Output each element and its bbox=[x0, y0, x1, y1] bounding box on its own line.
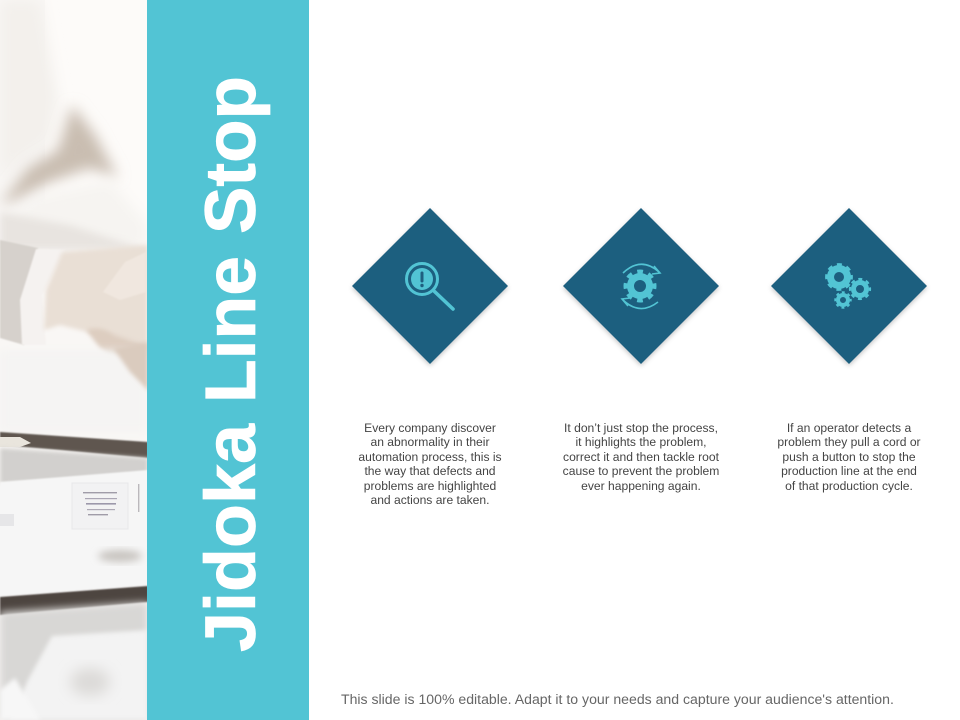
icon: three gears bbox=[826, 264, 870, 308]
footer note: This slide is 100% editable. Adapt it to your needs and capture your audience's attention. bbox=[341, 691, 894, 707]
text block: column 3 bbox=[777, 421, 921, 493]
text block: column 1 bbox=[358, 421, 502, 507]
photo: handshake over business documents bbox=[0, 0, 147, 720]
text block: column 2 bbox=[563, 421, 719, 493]
mini chart in document bbox=[0, 484, 139, 526]
diamond 3 with three gears icon bbox=[771, 208, 927, 364]
text block: column 2: ever happening again. bbox=[581, 479, 701, 493]
text block: column 1: and actions are taken. bbox=[370, 493, 490, 507]
title: Jidoka bbox=[192, 423, 271, 652]
text block: column 3: problem they pull a cord or bbox=[777, 435, 921, 449]
text block: column 1: Every company discover bbox=[364, 421, 496, 435]
panel: diamond icons bbox=[351, 208, 928, 367]
title: Line bbox=[192, 256, 271, 403]
diamond 2 with cycle gear icon bbox=[563, 208, 719, 364]
text block: column 2: it highlights the problem, bbox=[575, 435, 707, 449]
icon: gear with cycle arrows bbox=[622, 264, 660, 309]
text block: column 1: an abnormality in their bbox=[370, 435, 489, 449]
title bbox=[192, 76, 271, 652]
text block: column 2: It don’t just stop the process, bbox=[564, 421, 718, 435]
text block: column 2: correct it and then tackle root bbox=[563, 450, 719, 464]
diamond 1 with magnifier alert icon bbox=[352, 208, 508, 364]
title band bbox=[147, 0, 309, 720]
text block: column 1: the way that defects and bbox=[364, 464, 496, 478]
text block: column 3: of that production cycle. bbox=[785, 479, 913, 493]
text block: column 1: problems are highlighted bbox=[364, 479, 496, 493]
text block: column 3: If an operator detects a bbox=[787, 421, 911, 435]
title: Stop bbox=[192, 76, 271, 234]
text block: column 2: cause to prevent the problem bbox=[563, 464, 719, 478]
icon: magnifier with exclamation bbox=[406, 264, 453, 309]
text block: column 1: automation process, this is bbox=[358, 450, 502, 464]
text block: column 3: push a button to stop the bbox=[782, 450, 916, 464]
text block: column 3: production line at the end bbox=[781, 464, 917, 478]
